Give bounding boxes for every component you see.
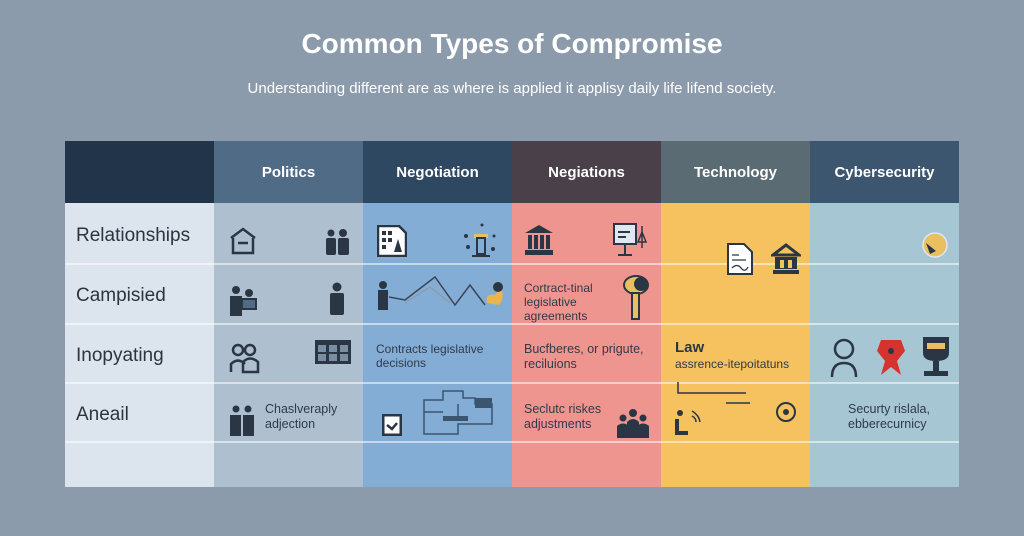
- column: cybersecurity: [810, 203, 959, 487]
- icon: people with board: [230, 286, 257, 316]
- subtitle: Understanding different are as where is applied it applisy daily life lifend society.: [248, 80, 776, 97]
- icon: podium: [464, 224, 496, 257]
- icon: network line: [378, 276, 503, 310]
- icon: arrow line: [677, 382, 750, 404]
- text: negiations row 3: reciluions: [524, 357, 577, 371]
- icon: goblet: [923, 337, 949, 376]
- icon: key: [623, 275, 649, 320]
- text: negiations row 4: adjustments: [524, 417, 591, 431]
- column: negotiation: [363, 203, 512, 487]
- text: negotiation row 3: decisions: [376, 356, 426, 370]
- text: negiations row 2: agreements: [524, 309, 587, 323]
- icon: red ribbon: [877, 340, 905, 375]
- column: technology: [661, 203, 810, 487]
- header: cybersecurity: Cybersecurity: [834, 164, 935, 180]
- text: law: Law: [675, 339, 704, 356]
- column: politics: [214, 203, 363, 487]
- text: politics row 4: adjection: [265, 417, 315, 431]
- row label: inopyating: Inopyating: [76, 345, 164, 366]
- column: labels: [65, 203, 214, 487]
- icon: two people: [326, 229, 349, 255]
- icon: tent: [230, 228, 256, 254]
- header: politics: Politics: [262, 164, 315, 180]
- header: blank: [65, 141, 214, 203]
- text: negotiation row 3: [376, 342, 483, 370]
- header: negiations: Negiations: [548, 164, 625, 180]
- header: negotiation: [363, 141, 512, 203]
- header: technology: [661, 141, 810, 203]
- icon: bank: [525, 225, 553, 255]
- text: negiations row 2: legislative: [524, 295, 577, 309]
- icon: document signed: [727, 243, 753, 275]
- column: negiations: [512, 203, 661, 487]
- title: Common Types of Compromise: [301, 28, 723, 59]
- icon: calendar grid: [315, 340, 351, 364]
- text: negiations row 3: [524, 342, 644, 371]
- text: negiations row 4: Seclutc riskes: [524, 402, 601, 416]
- text: negiations row 2: Cortract-tinal: [524, 281, 593, 295]
- text: negotiation row 3: Contracts legislative: [376, 342, 483, 356]
- text: politics row 4: [265, 402, 338, 431]
- icon: person signal: [675, 410, 701, 435]
- header: cybersecurity: [810, 141, 959, 203]
- text: technology row 3: assrence-itepoitatuns: [675, 357, 789, 371]
- text: negiations row 3: Bucfberes, or prigute,: [524, 342, 644, 356]
- icon: person: [330, 282, 344, 315]
- row label: relationships: Relationships: [76, 225, 190, 246]
- icon: two people small: [230, 406, 254, 436]
- header: politics: [214, 141, 363, 203]
- icon: search badge: [922, 232, 948, 258]
- header: technology: Technology: [694, 164, 777, 180]
- icon: document chart: [377, 225, 407, 257]
- text: cybersecurity row 4: [848, 402, 930, 431]
- text: negiations row 2: [524, 281, 593, 323]
- icon: document scale: [613, 223, 648, 256]
- text: politics row 4: Chaslveraply: [265, 402, 337, 416]
- header: negotiation: Negotiation: [396, 164, 479, 180]
- text: cybersecurity row 4: ebberecurnicy: [848, 417, 927, 431]
- icon: audience: [617, 409, 649, 438]
- icon: bank small: [771, 243, 801, 274]
- text: cybersecurity row 4: Securty rislala,: [848, 402, 930, 416]
- icon: person avatar: [830, 338, 858, 377]
- header: negiations: [512, 141, 661, 203]
- text: negiations row 4: [524, 402, 601, 431]
- icon: gear: [776, 402, 796, 422]
- row label: aneail: Aneail: [76, 404, 129, 425]
- row label: campisied: Campisied: [76, 285, 166, 306]
- icon: floor plan: [423, 390, 493, 435]
- icon: group: [230, 344, 260, 374]
- icon: checkbox: [382, 414, 402, 436]
